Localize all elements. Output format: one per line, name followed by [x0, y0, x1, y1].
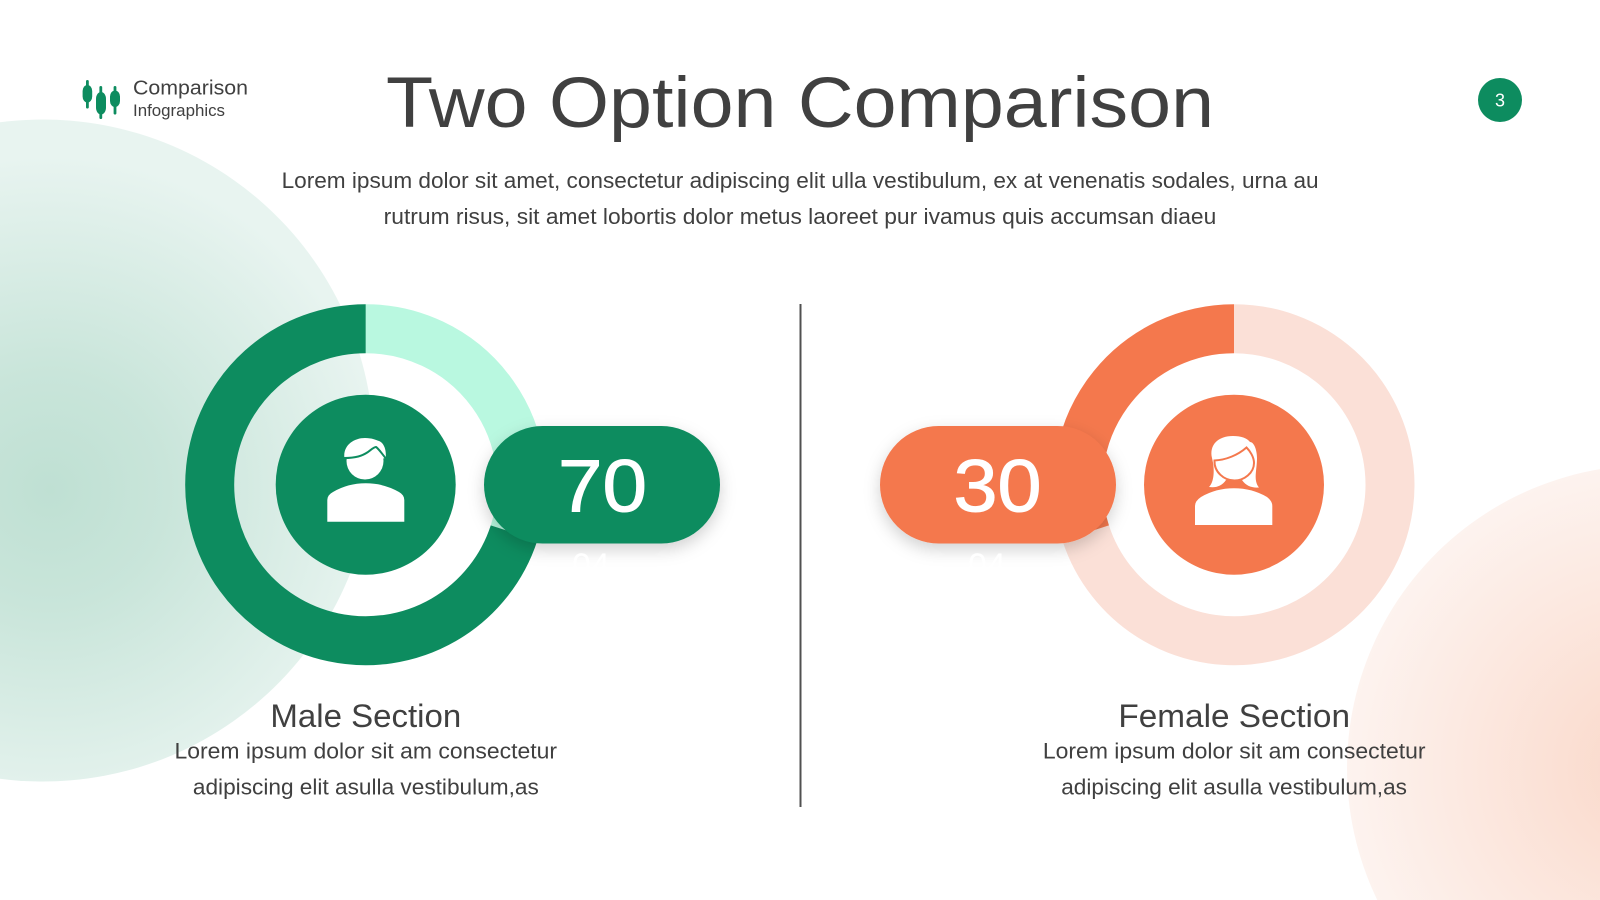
- pill: value 70: 70: [558, 444, 647, 528]
- logo name: Comparison: [133, 76, 248, 100]
- female heading: Female Section: [1118, 698, 1350, 734]
- female description: adipiscing elit asulla vestibulum,as: [1061, 774, 1407, 800]
- hidden label: 04: [572, 547, 610, 585]
- panel: male: [174, 329, 720, 800]
- hidden label: 04: [968, 547, 1006, 585]
- intro text: Lorem ipsum dolor sit amet, consectetur adipiscing elit ulla vestibulum, ex at venenatis sodales, urna au: [282, 168, 1319, 193]
- male heading: Male Section: [270, 698, 461, 734]
- male description: adipiscing elit asulla vestibulum,as: [193, 774, 539, 800]
- icon: male person: [276, 395, 456, 575]
- female description: Lorem ipsum dolor sit am consectetur: [1043, 738, 1426, 764]
- logo subtitle: Infographics: [133, 102, 225, 120]
- donut chart: 70 percent: [210, 329, 522, 641]
- background circle: green: [0, 119, 374, 782]
- donut chart: 30 percent: [1078, 329, 1390, 641]
- background circle: coral: [1347, 469, 1600, 900]
- icon: female person: [1144, 395, 1324, 575]
- panel: female: [880, 329, 1426, 800]
- icon: candlesticks: [83, 80, 120, 119]
- intro text: [282, 168, 1319, 229]
- male description: Lorem ipsum dolor sit am consectetur: [174, 738, 558, 764]
- page number badge: 3: [1495, 90, 1505, 110]
- female description: [1043, 738, 1426, 800]
- pill: value 70: [484, 426, 720, 544]
- pill: value 30: 30: [954, 444, 1042, 528]
- title: Two Option Comparison: [386, 64, 1214, 143]
- logo: [83, 76, 248, 120]
- page number badge: [1478, 78, 1522, 122]
- intro text: rutrum risus, sit amet lobortis dolor metus laoreet pur ivamus quis accumsan diaeu: [384, 204, 1216, 229]
- male description: [174, 738, 558, 800]
- divider: [800, 304, 802, 807]
- pill: value 30: [880, 426, 1116, 544]
